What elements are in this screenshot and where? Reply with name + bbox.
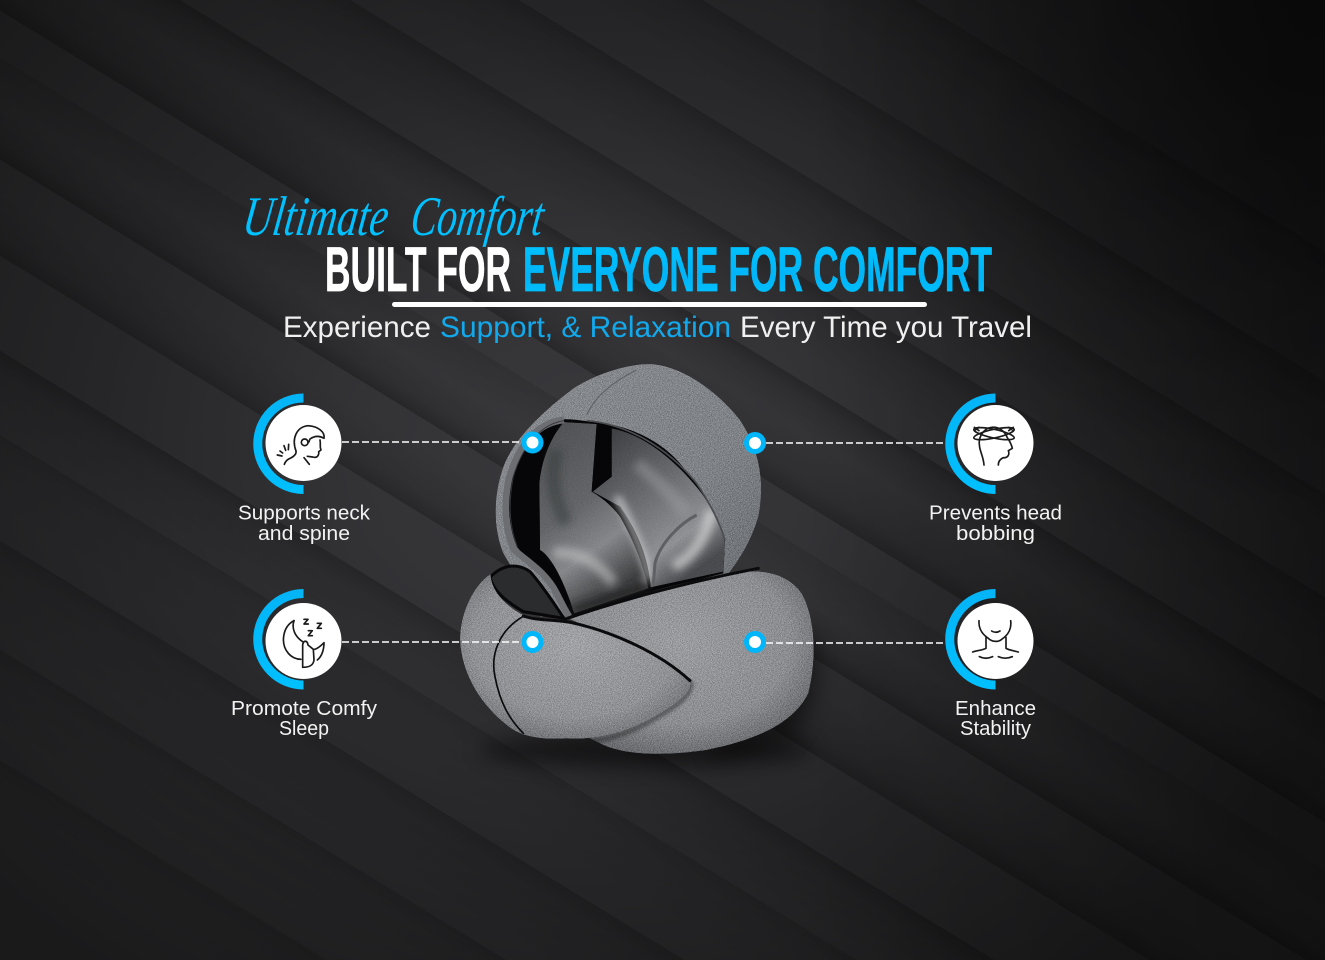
title: Ultimate Comfort script: Comfort [407, 186, 549, 248]
blue arc [253, 394, 304, 494]
hood interior [509, 419, 725, 616]
label: and spine [258, 523, 350, 545]
hood top seam [587, 370, 637, 415]
hotspot dots [524, 434, 764, 650]
mesh panel [490, 566, 564, 618]
label: bobbing [956, 523, 1035, 545]
label: Promote Comfy [231, 698, 377, 720]
hood outer [496, 364, 761, 617]
pillow right lobe [568, 571, 814, 754]
interior seam [653, 515, 697, 585]
label: Supports neck [238, 502, 371, 524]
label [955, 698, 1036, 740]
hood hem [506, 420, 569, 617]
feature: enhance stability [945, 589, 1036, 740]
icon: head with neck pain [277, 426, 324, 464]
subtitle [283, 311, 1032, 344]
title: Ultimate Comfort script [239, 186, 549, 248]
icon: dizzy head [973, 425, 1015, 465]
white circle [266, 603, 342, 679]
label [231, 698, 377, 740]
title: Ultimate Comfort script: Ultimate [239, 186, 393, 248]
label [238, 502, 371, 545]
connector: head bobbing [766, 442, 945, 444]
feature: promote comfy sleep [231, 589, 377, 740]
feature: supports neck and spine [238, 394, 371, 545]
headline: Built for everyone for comfort [325, 235, 992, 305]
pillow piping [494, 568, 758, 733]
subtitle: Support, & Relaxation [440, 311, 731, 344]
connector: stability [766, 642, 945, 644]
white circle [958, 405, 1034, 481]
label: Stability [960, 718, 1031, 740]
label: Prevents head [929, 502, 1062, 524]
white circle [266, 405, 342, 481]
pillow left flap [460, 574, 691, 739]
product: hooded neck pillow [460, 364, 818, 767]
white circle [958, 603, 1034, 679]
flap contact shadow [583, 682, 691, 741]
feature: prevents head bobbing [929, 394, 1062, 545]
interior folds [553, 450, 712, 610]
interior right panel [593, 428, 725, 587]
connector: neck support [342, 441, 522, 443]
interior left panel [539, 422, 648, 613]
blue arc [945, 589, 996, 690]
headline: Built for everyone for comfort: BUILT FOR [325, 235, 511, 305]
subtitle: Experience [283, 311, 431, 344]
icon: sleeping moon [283, 619, 324, 667]
connector: comfy sleep [342, 641, 522, 643]
label: Enhance [955, 698, 1036, 720]
icon: neck and shoulders [973, 621, 1018, 658]
subtitle: Every Time you Travel [740, 311, 1032, 344]
hood rim shade [587, 421, 725, 540]
title underline [392, 302, 927, 307]
label: Sleep [279, 718, 329, 740]
blue arc [945, 394, 996, 494]
label [929, 502, 1062, 545]
blue arc [253, 589, 304, 690]
